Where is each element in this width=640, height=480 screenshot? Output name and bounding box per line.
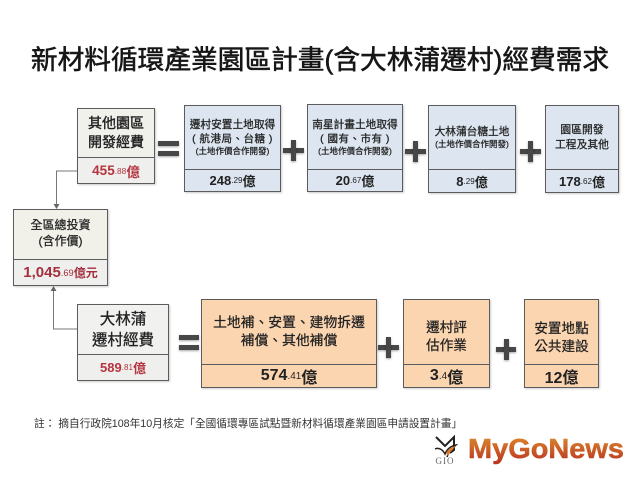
panel: other park development cost: [77, 108, 155, 184]
text: Nanxing land acquisition: [308, 105, 402, 170]
value: 248.29: 248 億: [210, 173, 255, 189]
text: park development engineering: [546, 106, 618, 170]
text: resettlement public works: 安置地點: [534, 320, 589, 336]
text: relocation land acquisition: (土地作價合作開發): [196, 146, 269, 156]
panel: resettlement public works: [524, 299, 599, 388]
panel: park development engineering: [545, 105, 619, 193]
plus sign 4: [377, 336, 400, 360]
panel: total investment: [13, 209, 108, 286]
value: 8.29: 8 億: [456, 174, 488, 190]
equals sign: top row: [156, 140, 180, 158]
value: 455.88: 455 億: [92, 163, 140, 180]
heading: total investment: 全區總投資: [30, 218, 90, 232]
heading: other park development: 其他園區: [88, 115, 144, 131]
heading: other park development: [78, 109, 154, 158]
text: park development engineering: 園區開發: [560, 124, 604, 136]
text: Nanxing land acquisition: (土地作價合作開發): [318, 146, 392, 156]
value: 574.41: .41: [287, 370, 301, 382]
text: resettlement public works: 公共建設: [534, 338, 589, 354]
text: resettlement public works: [525, 300, 598, 365]
value: 12: 12億: [545, 370, 578, 387]
plus sign 1: [282, 140, 306, 164]
text: relocation land acquisition: 遷村安置土地取得: [190, 119, 275, 131]
value: 178.62: .62: [581, 176, 592, 186]
panel: Nanxing land acquisition: [307, 104, 403, 192]
panel: Dalinpu Taisugar land: [428, 105, 516, 193]
value: 20.67: 20 億: [336, 173, 374, 189]
logo: MyGoNews: [434, 433, 624, 466]
heading: total investment: (含作價): [38, 234, 82, 248]
panel: compensation: [201, 299, 377, 388]
equals sign: bottom row: [178, 334, 200, 352]
value: 3.4: .4: [439, 370, 447, 382]
text: park development engineering: 工程及其他: [555, 138, 609, 150]
value: 589.81: .81: [122, 363, 133, 372]
value: 1,045.69: 1,045: [23, 264, 61, 281]
text: compensation: 土地補、安置、建物拆遷: [213, 315, 365, 330]
heading: Dalinpu relocation cost: [78, 305, 168, 355]
text: Nanxing land acquisition: ( 國有、市有 ): [320, 132, 390, 144]
value: 1,045.69: 億元: [74, 266, 98, 280]
footnote: 註： 摘自行政院108年10月核定「全國循環專區試點暨新材料循環產業園區申請設置計畫」: [34, 418, 462, 430]
title: 新材料循環產業園區計畫(含大林蒲遷村)經費需求: [31, 45, 609, 75]
text: Dalinpu Taisugar land: (土地作價合作開發): [435, 139, 509, 149]
value: 1,045.69: [23, 264, 98, 281]
text: Dalinpu Taisugar land: 大林蒲台糖土地: [435, 126, 509, 138]
value: 248.29: .29: [231, 176, 242, 185]
text: relocation assessment: [404, 300, 489, 365]
panel: relocation land acquisition: [184, 105, 281, 192]
value: 574.41: 574 億: [261, 367, 317, 387]
value: 3.4: 3 億: [430, 367, 463, 387]
text: compensation: 補償、其他補償: [241, 333, 337, 348]
text: Nanxing land acquisition: 南星計畫土地取得: [312, 118, 398, 130]
icon: GIO mark: [435, 437, 456, 466]
value: 178.62: 178 億: [559, 174, 605, 190]
plus sign 3: [518, 140, 542, 164]
value: 589.81: 589 億: [100, 360, 146, 376]
text: Dalinpu Taisugar land: [429, 106, 515, 170]
heading: Dalinpu relocation cost: 遷村經費: [92, 332, 154, 348]
plus sign 2: [404, 140, 428, 164]
value: 455.88: .88: [115, 166, 126, 176]
value: 1,045.69: .69: [61, 268, 74, 278]
icon: GIO mark: GIO: [436, 456, 454, 466]
text: relocation assessment: 估作業: [426, 338, 467, 353]
text: relocation land acquisition: ( 航港局、台糖 ): [192, 133, 273, 145]
plus sign 5: [494, 338, 518, 362]
value: 20.67: .67: [350, 176, 361, 185]
text: relocation assessment: 遷村評: [426, 320, 467, 335]
text: relocation land acquisition: [185, 106, 280, 170]
heading: other park development: 開發經費: [88, 134, 144, 150]
panel: Dalinpu relocation cost: [77, 304, 169, 381]
value: 8.29: .29: [464, 176, 475, 186]
heading: total investment: [14, 210, 107, 260]
panel: relocation assessment: [403, 299, 490, 388]
text: compensation: [202, 300, 376, 365]
heading: Dalinpu relocation cost: 大林蒲: [100, 310, 146, 328]
wordmark: MyGoNews: [468, 433, 624, 464]
